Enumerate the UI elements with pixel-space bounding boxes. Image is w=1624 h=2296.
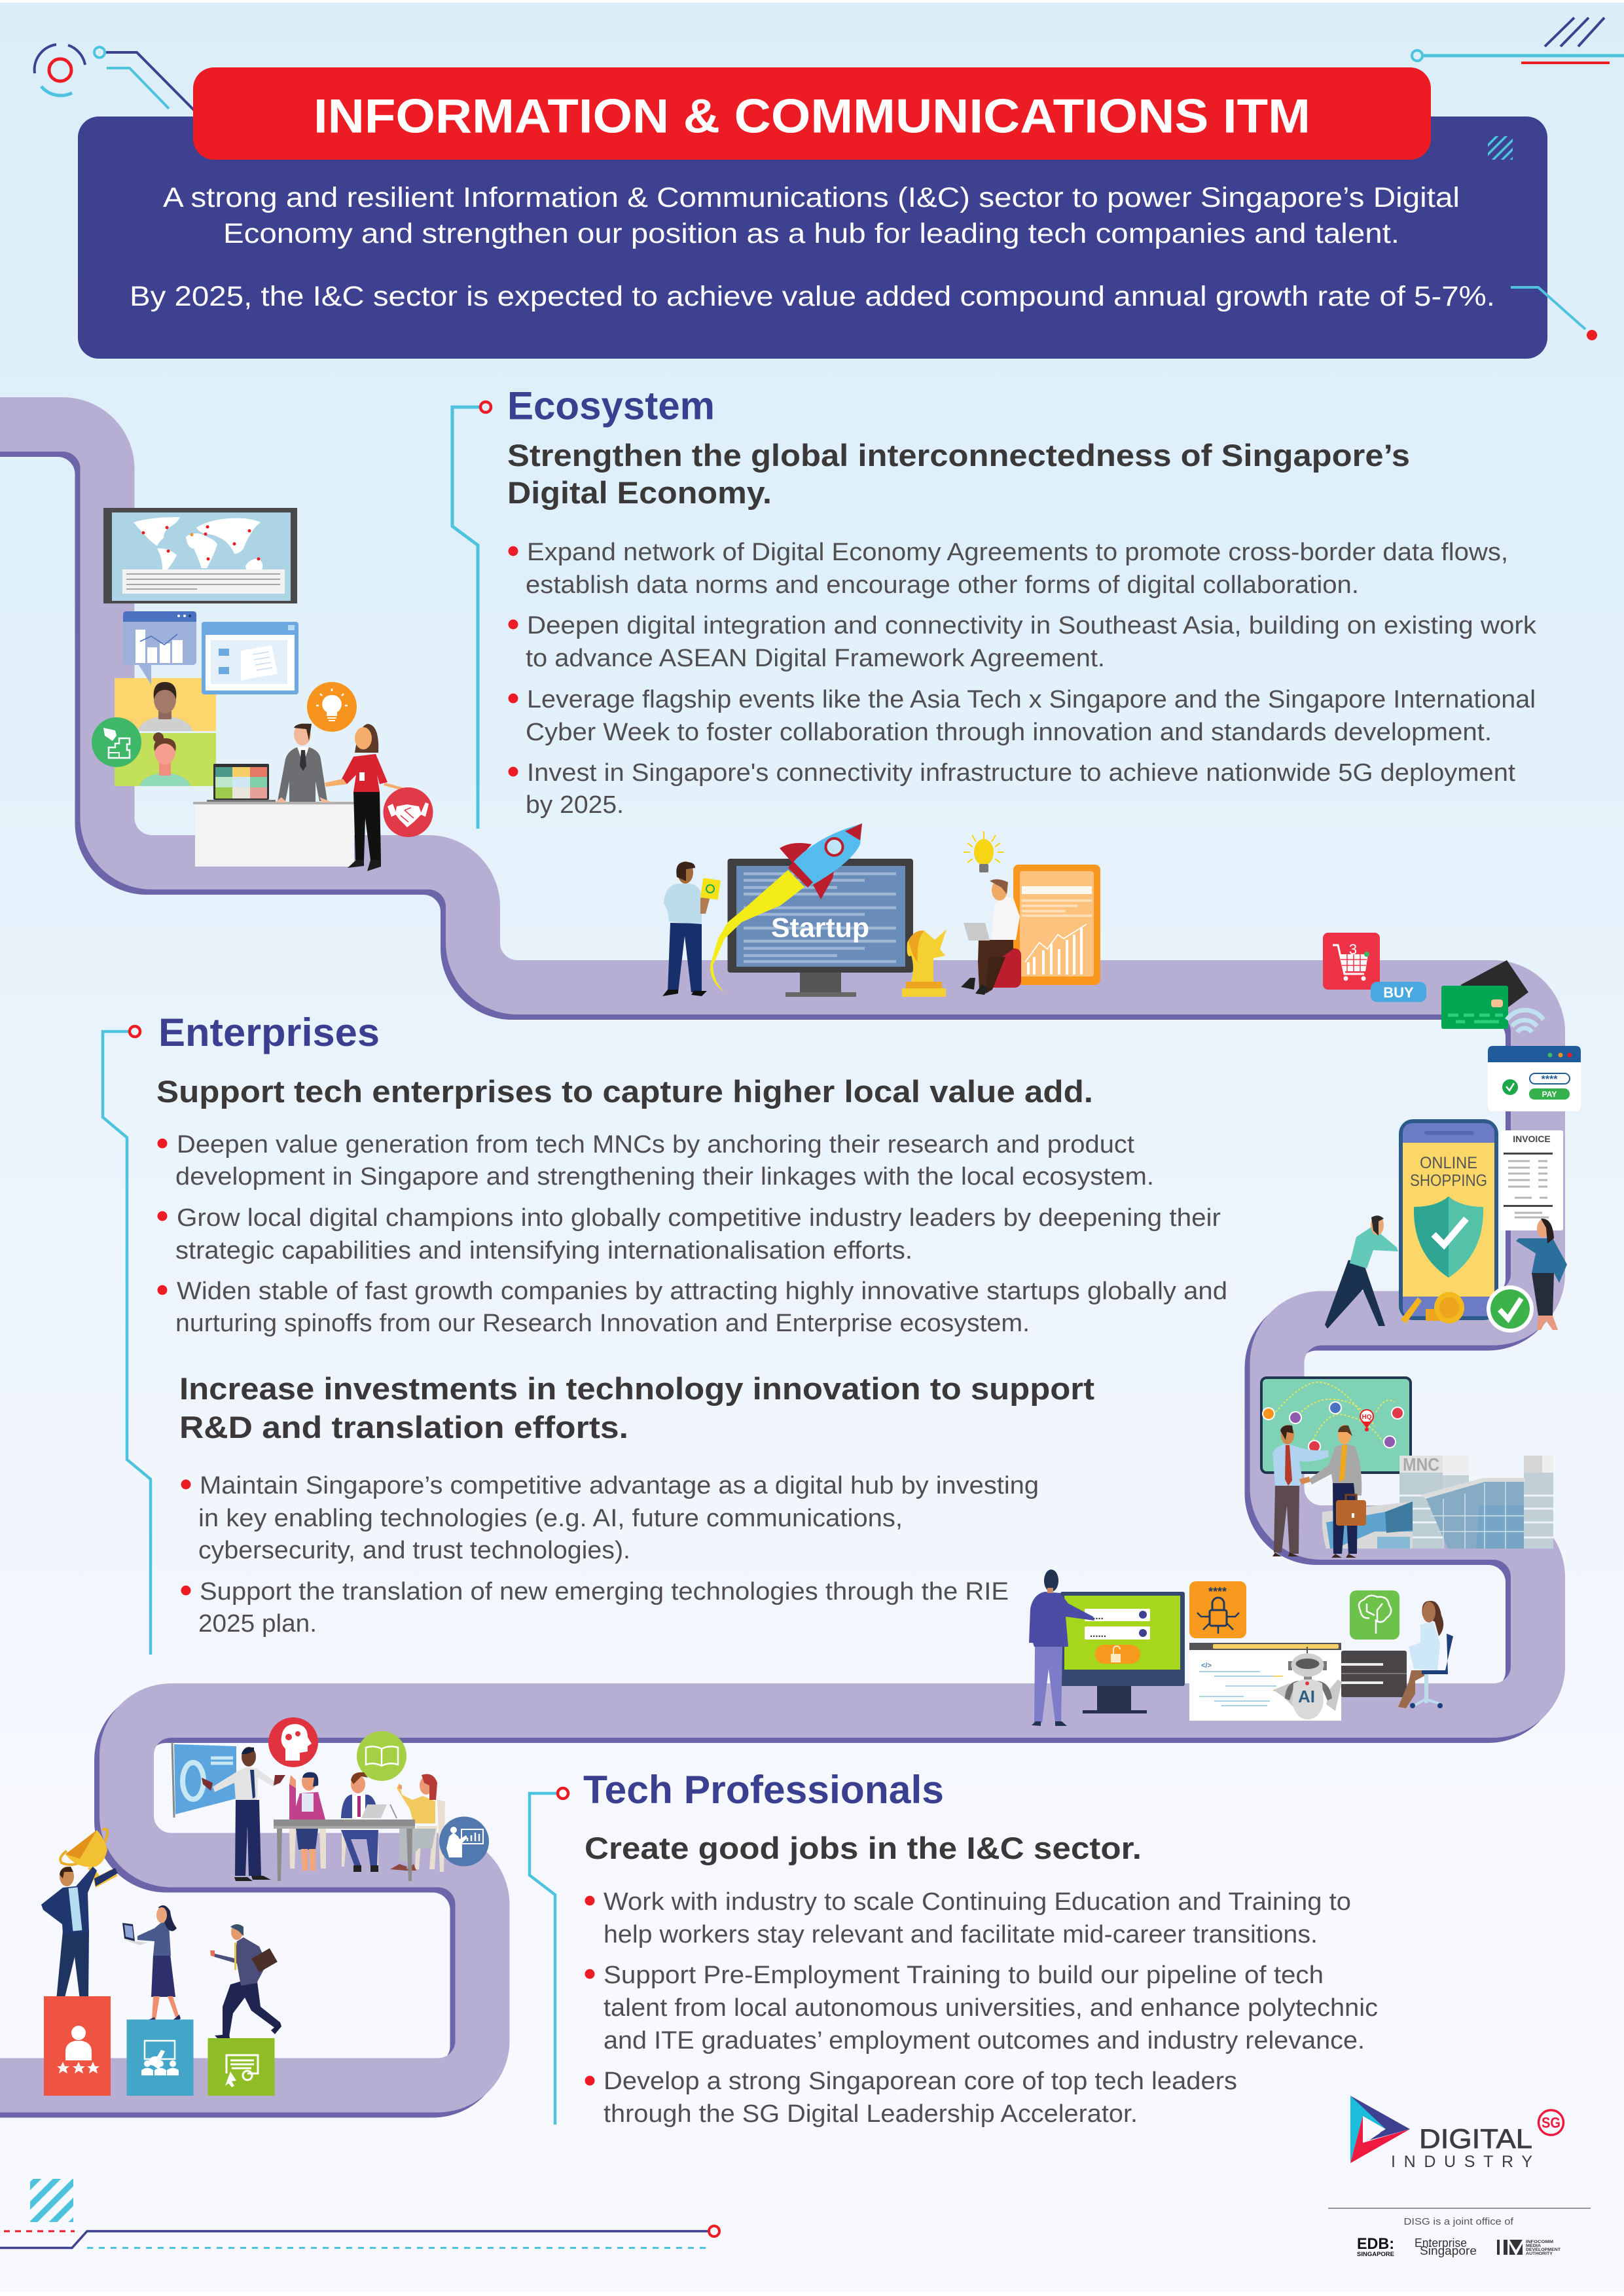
woman with tablet (1516, 1219, 1567, 1330)
man in grey suit (275, 723, 333, 802)
illustration: team training (172, 1717, 489, 1881)
code window (1189, 1643, 1341, 1721)
winding road (0, 424, 1538, 2090)
man with tablet (662, 861, 721, 996)
running man (210, 1924, 281, 2041)
world network board: HQ (1362, 1414, 1372, 1421)
heading: Tech Professionals: Tech Professionals (583, 1768, 944, 1812)
buy button: BUY (1383, 984, 1414, 1001)
icon: handshake (384, 787, 433, 837)
bullet list: enterprises 2: cybersecurity, and trust technologies). (198, 1537, 630, 1564)
podium: green (208, 2038, 275, 2096)
bullet list: ecosystem: Leverage flagship events like the Asia Tech x Singapore and the Singapore International (527, 686, 1536, 713)
woman with laptop (122, 1905, 181, 2024)
subheading: ecosystem (507, 438, 1410, 510)
bullet list: tech professionals: Work with industry to scale Continuing Education and Training to (604, 1888, 1351, 1916)
chess knight (902, 929, 947, 997)
heading: Ecosystem: Ecosystem (507, 384, 715, 428)
presenter (202, 1747, 285, 1881)
bullet list: enterprises 2 (181, 1472, 1039, 1638)
login monitor (1060, 1592, 1185, 1713)
bullet list: enterprises 2: in key enabling technologies (e.g. AI, future communications, (198, 1505, 903, 1532)
podium: red (44, 1996, 111, 2096)
bullet list: ecosystem: establish data norms and encourage other forms of digital collaboration. (526, 571, 1359, 599)
title banner: INFORMATION & COMMUNICATIONS ITM (314, 90, 1310, 143)
illustration: career podium (41, 1829, 281, 2096)
partner logos: SINGAPORE (1357, 2251, 1394, 2257)
subheading: tech professionals: Create good jobs in the I&C sector. (585, 1831, 1142, 1865)
presentation board (172, 1742, 236, 1818)
bullet list: enterprises 2: Support the translation of new emerging technologies through the RIE (200, 1578, 1009, 1605)
video tile man (115, 678, 216, 731)
intro text: Economy and strengthen our position as a hub for leading tech companies and talent. (223, 218, 1399, 249)
panel: intro (78, 117, 1547, 359)
title banner (193, 67, 1431, 160)
partner logos (1328, 2208, 1591, 2257)
invoice: INVOICE (1513, 1134, 1551, 1144)
bullet list: enterprises 1: Deepen value generation from tech MNCs by anchoring their research and product (177, 1131, 1134, 1158)
bullet list: ecosystem: Deepen digital integration and connectivity in Southeast Asia, building on existing work (527, 612, 1537, 639)
podium: blue (127, 2020, 194, 2096)
woman in yellow (390, 1774, 437, 1871)
bullet list: enterprises 1: Grow local digital champions into globally competitive industry leaders by deepening their (177, 1204, 1221, 1232)
login monitor: ..... (1090, 1611, 1104, 1622)
document window (202, 622, 298, 694)
subheading: ecosystem: Digital Economy. (507, 475, 772, 510)
partner logos: Singapore (1420, 2244, 1477, 2257)
orange tablet (1013, 865, 1100, 985)
bullet list: enterprises 1: Widen stable of fast growth companies by attracting highly innovative startups globally and (177, 1278, 1227, 1305)
heading: Enterprises: Enterprises (158, 1011, 380, 1054)
intro text (130, 182, 1495, 312)
logo: Digital Industry: DIGITAL (1419, 2123, 1532, 2154)
building (1322, 1454, 1553, 1549)
bullet list: tech professionals: through the SG Digital Leadership Accelerator. (604, 2100, 1138, 2128)
coins (1401, 1292, 1464, 1323)
icon: digital brain (1350, 1590, 1399, 1640)
bullet list: enterprises 2: 2025 plan. (198, 1610, 317, 1638)
bullet list: tech professionals: help workers stay relevant and facilitate mid-career transitions. (604, 1921, 1318, 1948)
bullet list: enterprises 1: development in Singapore and strengthening their linkages with the local ecosystem. (175, 1163, 1154, 1191)
subheading: ecosystem: Strengthen the global interconnectedness of Singapore’s (507, 438, 1410, 473)
icon: puzzle (92, 717, 141, 767)
login monitor: ...... (1090, 1628, 1106, 1640)
bullet list: enterprises 1: nurturing spinoffs from our Research Innovation and Enterprise ecosystem. (175, 1310, 1030, 1337)
bullet list: ecosystem: Expand network of Digital Economy Agreements to promote cross-border data flows, (527, 539, 1508, 566)
icon: brain gears (268, 1717, 318, 1767)
startup label: Startup (771, 912, 869, 942)
partner logos: MEDIA (1526, 2244, 1541, 2248)
woman in red (325, 724, 405, 871)
logo: Digital Industry: SG (1542, 2114, 1561, 2131)
partner logos: Enterprise (1415, 2236, 1467, 2250)
bullet list: ecosystem: Cyber Week to foster collaboration through innovation and standards development. (526, 719, 1492, 746)
bullet list: enterprises 1: strategic capabilities and intensifying internationalisation efforts. (175, 1237, 912, 1265)
check badge (1487, 1285, 1534, 1333)
bullet list: enterprises 2: Maintain Singapore’s competitive advantage as a digital hub by investing (200, 1472, 1039, 1499)
partner logos: DEVELOPMENT (1526, 2248, 1561, 2252)
subheading: enterprises 2: R&D and translation efforts. (179, 1410, 628, 1444)
partner logos: EDB: (1357, 2235, 1394, 2253)
robot (1273, 1647, 1342, 1719)
illustration: global collaboration (92, 508, 433, 871)
subheading: enterprises: Support tech enterprises to capture higher local value add. (156, 1074, 1093, 1109)
smartphone (1399, 1119, 1498, 1320)
chairs (289, 1800, 445, 1872)
bullet list: ecosystem: by 2025. (526, 791, 624, 819)
logo: Digital Industry: INDUSTRY (1391, 2153, 1532, 2171)
payment window: **** (1542, 1074, 1558, 1085)
partner logos: DISG is a joint office of (1403, 2216, 1514, 2227)
man with trophy (41, 1867, 97, 2001)
robot: AI (1298, 1687, 1315, 1706)
table (274, 1820, 415, 1881)
world network board (1261, 1378, 1411, 1473)
yellow bulb (964, 831, 1004, 872)
illustration: cybersecurity and AI (1029, 1570, 1453, 1726)
bullet list: enterprises 1 (157, 1131, 1227, 1337)
woman in magenta (289, 1772, 325, 1871)
bullet list: ecosystem: Invest in Singapore's connectivity infrastructure to achieve nationwide 5G deployment (527, 759, 1515, 787)
connector: ecosystem (452, 402, 491, 829)
icon: shopping cart (1323, 933, 1380, 990)
illustration: MNC partnership (1261, 1378, 1553, 1558)
man at monitor (1029, 1570, 1094, 1726)
decoration: top right circuit (1412, 18, 1624, 64)
subheading: enterprises 2: Increase investments in technology innovation to support (179, 1371, 1094, 1406)
man with laptop (341, 1772, 397, 1872)
decoration: bottom circuit (0, 2226, 719, 2248)
bullet list: tech professionals (585, 1888, 1378, 2128)
handshake men (1272, 1425, 1366, 1558)
logo: Digital Industry (1350, 2096, 1563, 2171)
icon: presenter chart (439, 1817, 489, 1867)
decoration: top left circuit (35, 45, 196, 113)
smartphone: SHOPPING (1410, 1172, 1487, 1190)
seated man (961, 879, 1021, 995)
icon: security lock: **** (1208, 1585, 1227, 1598)
payment window (1488, 1046, 1581, 1111)
decoration: intro connector (1511, 287, 1597, 340)
illustration: startup (662, 823, 1581, 1333)
bullet list: tech professionals: and ITE graduates’ employment outcomes and industry relevance. (604, 2027, 1365, 2054)
smartphone: ONLINE (1420, 1154, 1477, 1172)
bullet list: tech professionals: talent from local autonomous universities, and enhance polytechnic (604, 1994, 1378, 2022)
icon: shopping cart: 3 (1349, 941, 1357, 958)
partner logos: AUTHORITY (1526, 2251, 1553, 2256)
woman at desk (1398, 1601, 1453, 1708)
decoration: hatch (1488, 136, 1513, 160)
icon: open book (357, 1731, 406, 1781)
invoice (1500, 1130, 1563, 1230)
payment cards (1441, 960, 1528, 1029)
wifi signal (1507, 1010, 1543, 1032)
code window: </> (1201, 1662, 1212, 1670)
subheading: enterprises 2 (179, 1371, 1094, 1444)
connector: tech professionals (530, 1788, 568, 2125)
video tile woman (115, 732, 216, 786)
intro text: By 2025, the I&C sector is expected to achieve value added compound annual growth rate of 5-7%. (130, 281, 1495, 312)
world map screen (103, 508, 297, 603)
icon: security lock (1189, 1581, 1246, 1638)
intro text: A strong and resilient Information & Communications (I&C) sector to power Singapore’s Digital (163, 182, 1460, 213)
bullet list: tech professionals: Develop a strong Singaporean core of top tech leaders (604, 2068, 1237, 2095)
building: MNC (1403, 1454, 1439, 1475)
connector: enterprises (103, 1026, 151, 1655)
monitor (728, 859, 913, 997)
bullet list: ecosystem: to advance ASEAN Digital Framework Agreement. (526, 645, 1105, 672)
icon: light bulb (307, 682, 357, 732)
bullet list: tech professionals: Support Pre-Employment Training to build our pipeline of tech (604, 1962, 1324, 1989)
chart window (123, 611, 196, 685)
man pushing phone (1325, 1215, 1398, 1329)
trophy (60, 1829, 118, 1888)
server (1341, 1651, 1407, 1697)
buy button (1371, 982, 1426, 1002)
desk and laptop (193, 764, 354, 867)
partner logos: INFOCOMM (1526, 2240, 1553, 2244)
decoration: bottom hatch (30, 2179, 73, 2222)
payment window: PAY (1542, 1090, 1557, 1099)
bullet list: ecosystem (508, 539, 1537, 819)
rocket (710, 823, 862, 992)
